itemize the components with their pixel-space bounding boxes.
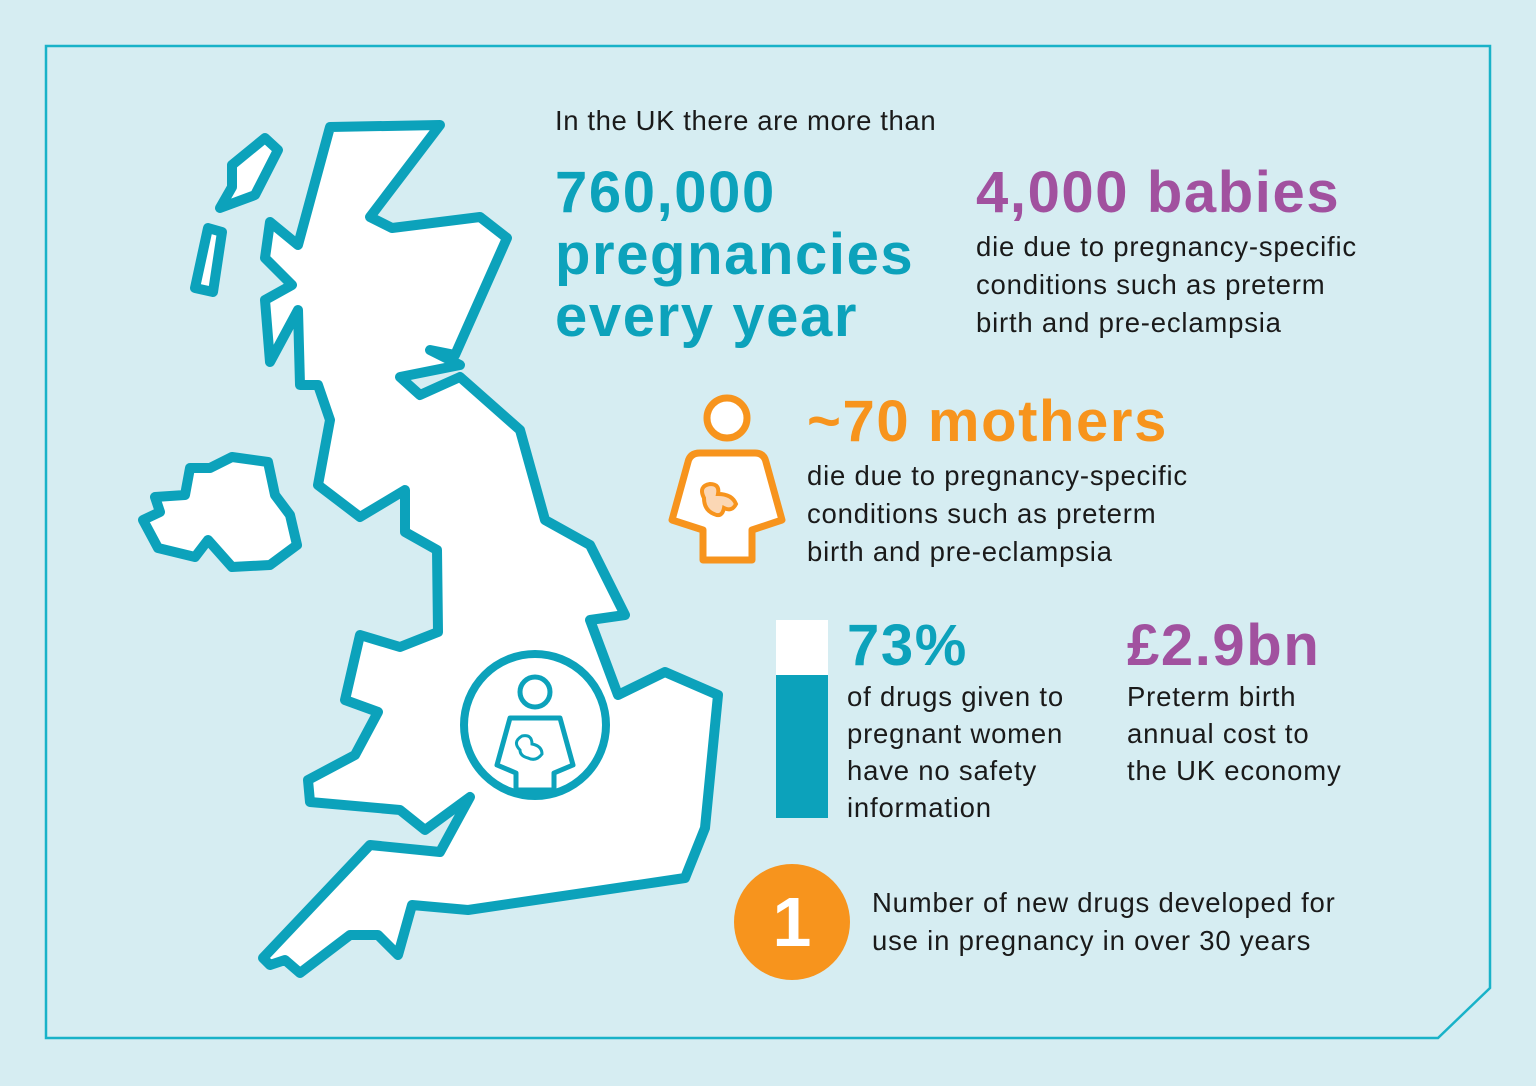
stat: drugs 73%: pregnant women <box>847 718 1063 749</box>
stat: drugs 73%: have no safety <box>847 755 1037 786</box>
stat: mothers: ~70 mothers <box>807 389 1168 454</box>
stat: cost: Preterm birth <box>1127 681 1296 712</box>
stat: drugs 73%: of drugs given to <box>847 681 1064 712</box>
stat: mothers <box>807 389 1188 567</box>
stat: babies: die due to pregnancy-specific <box>976 231 1357 262</box>
stat: babies <box>976 160 1357 338</box>
map: Great Britain <box>143 125 718 973</box>
stat: cost: the UK economy <box>1127 755 1342 786</box>
stat: pregnancies: 760,000 <box>555 160 776 225</box>
icon: orange mother <box>668 394 786 564</box>
stat: cost: annual cost to <box>1127 718 1309 749</box>
intro text: In the UK there are more than <box>555 105 936 136</box>
stat: pregnancies: every year <box>555 284 858 349</box>
stat: drugs 73%: 73% <box>847 613 968 678</box>
icon: number 1: 1 <box>773 883 811 961</box>
stat: mothers: birth and pre-eclampsia <box>807 536 1113 567</box>
stat: cost: £2.9bn <box>1127 613 1320 678</box>
stat: new drugs <box>872 887 1336 956</box>
stat: new drugs: Number of new drugs developed for <box>872 887 1336 918</box>
stat: drugs 73% <box>847 613 1064 823</box>
stat: mothers: die due to pregnancy-specific <box>807 460 1188 491</box>
stat: pregnancies <box>555 160 914 349</box>
icon: number 1 <box>734 864 850 980</box>
stat: new drugs: use in pregnancy in over 30 years <box>872 925 1311 956</box>
stat: cost <box>1127 613 1342 786</box>
icon: circle mother <box>464 654 606 796</box>
bar: 73% <box>776 620 828 818</box>
stat: pregnancies: pregnancies <box>555 222 914 287</box>
stat: drugs 73%: information <box>847 792 992 823</box>
stat: babies: birth and pre-eclampsia <box>976 307 1282 338</box>
stat: babies: 4,000 babies <box>976 160 1340 225</box>
stat: mothers: conditions such as preterm <box>807 498 1156 529</box>
stat: babies: conditions such as preterm <box>976 269 1325 300</box>
